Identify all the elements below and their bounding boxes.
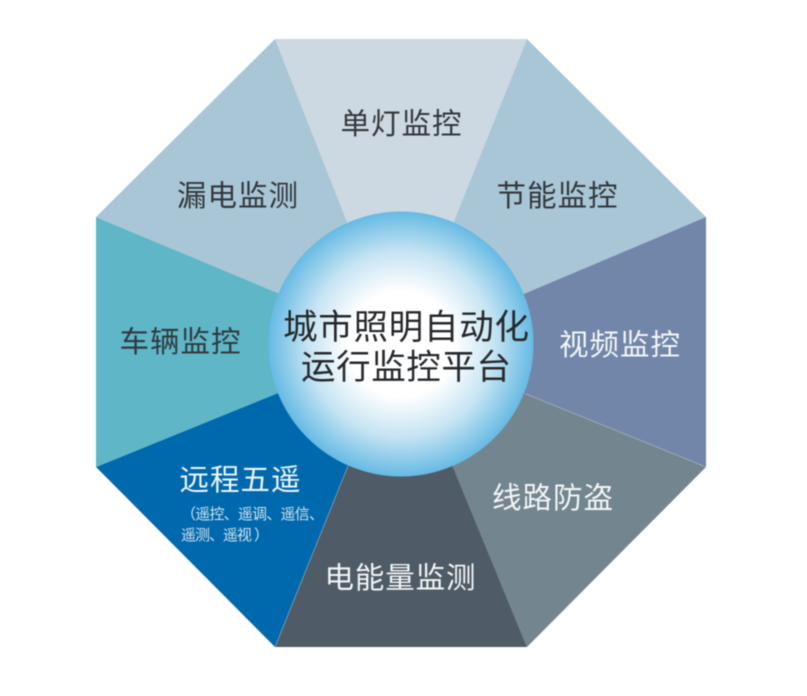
segment: 电能量监测: 电能量监测 bbox=[324, 562, 476, 595]
segment: 视频监控: 视频监控 bbox=[559, 329, 680, 362]
segment: 单灯监控 bbox=[275, 39, 527, 344]
heading: 远程五遥: 远程五遥 bbox=[180, 464, 300, 497]
segment: 单灯监控: 单灯监控 bbox=[340, 108, 462, 141]
hub title: 城市照明自动化 bbox=[283, 309, 529, 347]
hub title bbox=[283, 309, 529, 387]
hub title: 运行监控平台 bbox=[301, 349, 511, 387]
segment: 节能监控 bbox=[401, 39, 706, 344]
segment: 漏电监测: 漏电监测 bbox=[177, 180, 298, 213]
segment: 漏电监测 bbox=[96, 39, 401, 344]
segment: 线路防盗 bbox=[401, 344, 706, 647]
text block: 五遥明细: （遥控、遥调、遥信、 bbox=[181, 506, 324, 523]
segment: 车辆监控 bbox=[96, 217, 401, 467]
segment: 视频监控 bbox=[401, 217, 706, 467]
segment: 节能监控: 节能监控 bbox=[496, 180, 618, 213]
segment: 电能量监测 bbox=[275, 344, 527, 647]
center hub bbox=[268, 212, 534, 476]
segment: 远程五遥 bbox=[96, 344, 401, 647]
segment: 车辆监控: 车辆监控 bbox=[120, 326, 240, 359]
text block: 五遥明细: 遥测、遥视 ） bbox=[181, 527, 269, 544]
text block: 五遥明细 bbox=[181, 506, 324, 544]
segment: 线路防盗: 线路防盗 bbox=[492, 482, 613, 515]
